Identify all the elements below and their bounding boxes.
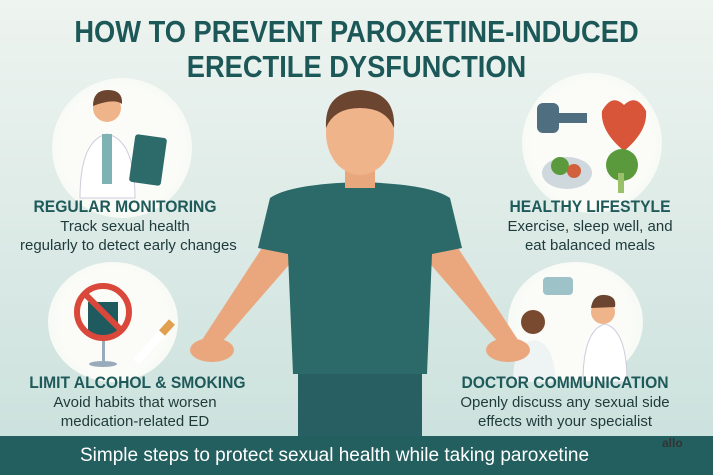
text: limit alcohol: LIMIT ALCOHOL & SMOKING xyxy=(29,373,246,392)
footer banner: Simple steps to protect sexual health while taking paroxetine xyxy=(80,445,589,466)
panel: doctor communication illustration xyxy=(508,262,643,382)
text: doctor communication: Openly discuss any sexual side xyxy=(460,394,670,411)
text: limit alcohol: medication-related ED xyxy=(61,413,209,430)
panel: limit alcohol illustration xyxy=(48,262,178,382)
text: limit alcohol xyxy=(29,373,246,430)
text: regular monitoring: Track sexual health xyxy=(60,218,190,235)
text: healthy lifestyle: eat balanced meals xyxy=(525,237,655,254)
panel: healthy lifestyle illustration xyxy=(522,73,662,213)
text: healthy lifestyle: HEALTHY LIFESTYLE xyxy=(509,197,671,216)
central figure xyxy=(190,90,530,436)
text: healthy lifestyle: Exercise, sleep well, and xyxy=(507,218,673,235)
text: doctor communication: DOCTOR COMMUNICATION xyxy=(461,373,669,392)
text: regular monitoring: regularly to detect early changes xyxy=(20,237,237,254)
text: regular monitoring: REGULAR MONITORING xyxy=(33,197,217,216)
text: doctor communication: effects with your specialist xyxy=(478,413,652,430)
title xyxy=(74,14,639,84)
text: limit alcohol: Avoid habits that worsen xyxy=(53,394,217,411)
panel: regular monitoring illustration xyxy=(52,78,192,218)
footer banner xyxy=(0,436,713,475)
text: regular monitoring xyxy=(20,197,237,254)
title: HOW TO PREVENT PAROXETINE-INDUCED xyxy=(74,14,639,49)
title: ERECTILE DYSFUNCTION xyxy=(187,49,526,84)
logo: allo xyxy=(662,436,683,450)
text: healthy lifestyle xyxy=(507,197,673,254)
text: doctor communication xyxy=(460,373,670,430)
